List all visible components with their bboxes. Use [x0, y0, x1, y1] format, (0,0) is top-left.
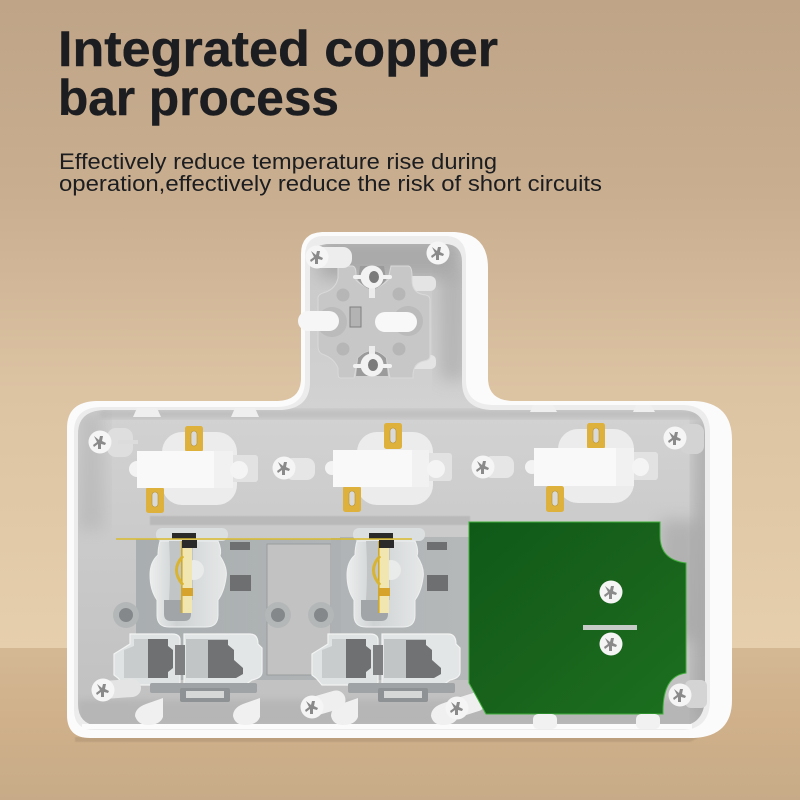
outer white shell — [67, 232, 732, 738]
lower stud — [353, 346, 392, 376]
floor shadow — [75, 737, 700, 742]
description text: Effectively reduce temperature rise during — [59, 149, 497, 174]
pin left — [298, 311, 339, 331]
pcb screw lower — [600, 632, 622, 656]
modular jacks set 2 — [312, 634, 460, 702]
module frame — [136, 537, 470, 680]
mounting posts with screws — [88, 424, 704, 480]
row of switches — [129, 423, 658, 513]
background: floor — [0, 648, 800, 800]
cavity shading — [78, 238, 713, 726]
bottom pcb tabs — [533, 714, 557, 729]
title: Integrated copper — [58, 21, 498, 77]
modular jacks set 1 — [114, 634, 262, 702]
socket shell opened from the back — [67, 232, 732, 742]
top right screw — [426, 242, 450, 264]
title — [58, 21, 498, 126]
centre window — [267, 544, 331, 675]
description text — [59, 149, 602, 196]
shell rim shade — [74, 236, 710, 730]
grey socket modules — [113, 528, 470, 702]
pcb bar — [583, 625, 637, 630]
plug module: grey pin holder — [298, 242, 450, 378]
mounting rings — [113, 602, 334, 628]
copper bar — [116, 538, 412, 540]
upper stud — [353, 266, 392, 298]
switch 1 — [129, 426, 258, 513]
bottom lip — [82, 724, 692, 729]
lower posts and fins — [92, 678, 476, 725]
socket cup 1 with copper contact — [150, 528, 228, 627]
top left post — [312, 247, 352, 268]
inner cavity — [78, 244, 705, 726]
description text: operation,effectively reduce the risk of short circuits — [59, 171, 602, 196]
top latches — [133, 405, 655, 417]
pcb screw upper — [600, 580, 622, 604]
small slots — [230, 542, 448, 591]
title: bar process — [58, 70, 339, 126]
bottom corner screw — [685, 680, 707, 708]
pin right — [375, 312, 417, 332]
switch 3 — [525, 423, 658, 512]
switch 2 — [325, 423, 452, 512]
socket cup 2 with copper contact — [347, 528, 425, 627]
green circuit board — [469, 522, 707, 729]
